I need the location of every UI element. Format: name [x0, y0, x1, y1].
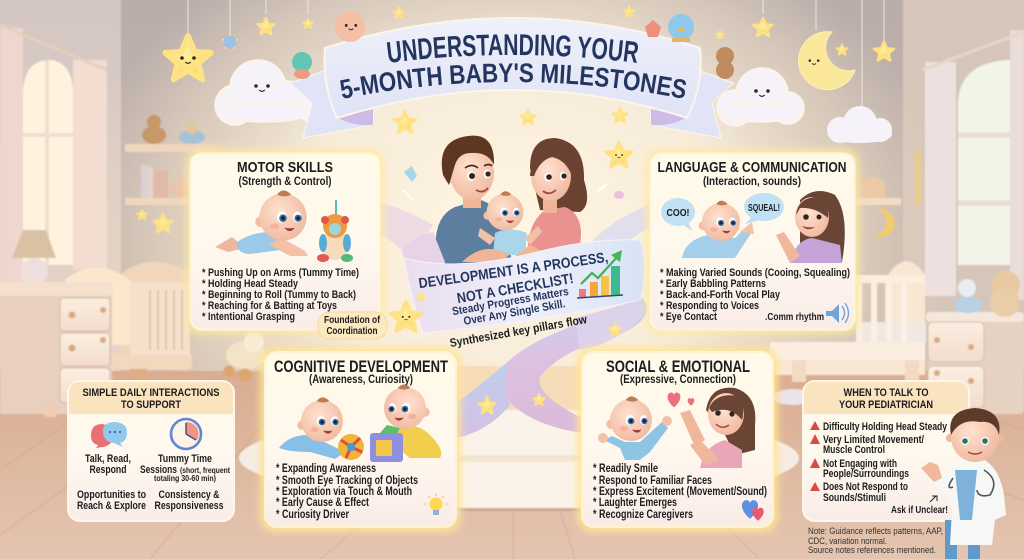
- warning list: [823, 421, 948, 504]
- heading: SIMPLE DAILY INTERACTIONS: [82, 387, 220, 399]
- milestones list: * Making Varied Sounds (Cooing, Squealing): [660, 267, 850, 279]
- icon: speaker: [826, 303, 848, 323]
- icon: speech bubbles: [91, 422, 127, 448]
- milestones list: * Recognize Caregivers: [593, 509, 693, 521]
- warning list: Very Limited Movement/: [823, 434, 924, 446]
- banner toppers: [292, 12, 734, 79]
- milestones list: * Exploration via Touch & Mouth: [276, 486, 412, 498]
- milestones list: * Curiosity Driver: [276, 509, 349, 521]
- source note: Source notes references mentioned.: [808, 545, 936, 556]
- heading: SOCIAL & EMOTIONAL: [606, 357, 750, 376]
- illustration: baby with cube: [370, 384, 441, 462]
- callout body: Steady Progress Matters: [451, 286, 570, 318]
- milestones list: * Early Cause & Effect: [276, 497, 369, 509]
- label: opportunities: [77, 489, 146, 512]
- milestones list: [276, 463, 418, 521]
- callout heading: DEVELOPMENT IS A PROCESS,: [418, 250, 609, 292]
- family illustration: [435, 136, 587, 264]
- swoosh band: left: [457, 360, 510, 438]
- label: opportunities: Reach & Explore: [77, 500, 146, 512]
- illustration: babbling baby: [682, 201, 754, 258]
- speech bubble: coo: COO!: [666, 207, 690, 219]
- milestones list: * Respond to Familiar Faces: [593, 475, 712, 487]
- subheading: (Interaction, sounds): [703, 176, 801, 188]
- clouds: [215, 60, 892, 143]
- panel: simple daily interactions: TO SUPPORT: [121, 399, 181, 411]
- illustration: plush toy: [317, 198, 381, 262]
- heading: LANGUAGE & COMMUNICATION: [658, 160, 846, 176]
- right dresser: [926, 312, 1024, 414]
- milestones list: [202, 267, 359, 323]
- subheading: (Expressive, Connection): [620, 374, 736, 386]
- right crib: [770, 261, 926, 382]
- label: tummy time sessions: Tummy Time: [158, 453, 212, 465]
- milestones list: .Comm rhythm: [765, 312, 824, 323]
- milestones list: [593, 463, 767, 521]
- ribbon caption: Synthesized key pillars flow: [449, 312, 589, 350]
- hanging mobiles: stars and moon: [165, 0, 894, 107]
- icon: blue and red hearts: [742, 500, 764, 521]
- warning list: Not Engaging with: [823, 458, 897, 470]
- center ribbon callout: [402, 232, 645, 333]
- milestones list: * Responding to Voices: [660, 300, 759, 312]
- label: talk read respond: Talk, Read,: [85, 453, 131, 465]
- left crib: [65, 262, 192, 380]
- mattress: [457, 410, 582, 511]
- banner tails: [290, 70, 373, 138]
- warning list: People/Surroundings: [823, 468, 909, 480]
- icon: toy house: [645, 20, 661, 37]
- teddy bear and toy on dresser: [954, 271, 1020, 317]
- heading: COGNITIVE DEVELOPMENT: [274, 357, 448, 376]
- icon: hearts: [668, 393, 694, 407]
- heading: MOTOR SKILLS: [237, 159, 333, 176]
- icon: big smiling star: [165, 36, 211, 79]
- decorative stars under banner: [394, 108, 632, 201]
- dad: [435, 136, 512, 264]
- label: tummy time sessions: Sessions: [140, 464, 177, 476]
- icon: right cloud: [717, 68, 804, 126]
- label: consistency: Responsiveness: [154, 500, 224, 512]
- label: talk read respond: [85, 453, 131, 476]
- label: opportunities: Opportunities to: [77, 489, 146, 501]
- icon: left cloud: [215, 60, 323, 125]
- peach floor glow behind ribbon: [457, 366, 582, 416]
- swoosh band: right curl: [502, 296, 647, 433]
- left window: [0, 25, 107, 288]
- lamp: [12, 230, 56, 286]
- icon: clock: [171, 419, 201, 449]
- milestones list: * Readily Smile: [593, 463, 658, 475]
- banner body: [324, 18, 701, 118]
- badge: foundation of coordination: Foundation of: [324, 315, 381, 326]
- label: talk read respond: Respond: [90, 464, 126, 476]
- milestones list: * Smooth Eye Tracking of Objects: [276, 475, 418, 487]
- speech bubble: squeal: [744, 193, 784, 224]
- ribbon body: [404, 240, 645, 333]
- illustration: baby with ball: [279, 397, 364, 460]
- title text: UNDERSTANDING YOUR: [386, 34, 638, 63]
- arrow: [930, 496, 937, 502]
- ribbon stars: [391, 292, 622, 413]
- warning icons: [810, 421, 820, 491]
- milestones list: * Expanding Awareness: [276, 463, 376, 475]
- illustration: tummy-time baby: [215, 190, 308, 256]
- baby held by parents: [462, 191, 545, 262]
- icon: far right cloud: [827, 106, 892, 143]
- panel: cognitive development: [260, 347, 461, 532]
- speech bubble: squeal: SQUEAL!: [748, 202, 780, 214]
- speech bubble: coo: [661, 198, 695, 231]
- warning list: Sounds/Stimuli: [823, 492, 886, 504]
- label: consistency: [154, 489, 224, 512]
- milestones list: * Laughter Emerges: [593, 497, 677, 509]
- milestones list: * Holding Head Steady: [202, 278, 299, 290]
- milestones list: * Intentional Grasping: [202, 311, 295, 323]
- right shelf: [856, 150, 921, 237]
- label: consistency: Consistency &: [158, 489, 220, 501]
- icon: light bulb: [423, 493, 449, 515]
- panel: when to talk to your pediatrician: YOUR PEDIATRICIAN: [839, 399, 933, 411]
- label: tummy time sessions: [140, 453, 230, 483]
- icon: pink baby toy: [335, 12, 365, 42]
- illustration: doctor: [921, 408, 1006, 559]
- icon: teddy bear: [716, 47, 734, 79]
- heading: WHEN TO TALK TO: [844, 387, 929, 399]
- panel: social and emotional: [577, 347, 778, 532]
- milestones list: * Eye Contact: [660, 311, 717, 323]
- header band: [69, 382, 233, 414]
- title banner: 5-MONTH BABY'S MILESTONES: [340, 63, 686, 98]
- flowing ribbon swooshes: [336, 197, 650, 438]
- ribbon lower fold: [575, 300, 643, 350]
- source note: [808, 526, 943, 556]
- left shelves: [125, 115, 217, 232]
- icon: crescent moon: [799, 32, 855, 90]
- panel: language and communication: [646, 149, 859, 334]
- illustration: smiling baby: [598, 396, 672, 460]
- growth chart icon: [577, 250, 623, 298]
- plush lamb on floor: [224, 332, 266, 382]
- ribbon fold: [402, 232, 445, 333]
- panel: simple daily interactions: [68, 381, 234, 521]
- milestones list: * Beginning to Roll (Tummy to Back): [202, 289, 356, 301]
- panel: when to talk to your pediatrician: [803, 381, 969, 521]
- source note: Note: Guidance reflects patterns, AAP,: [808, 526, 943, 537]
- milestones list: * Express Excitement (Movement/Sound): [593, 486, 767, 498]
- illustration: mother waving: [680, 388, 755, 468]
- label: tummy time sessions: totaling 30-60 min): [154, 474, 216, 483]
- header band: [804, 382, 968, 414]
- milestones list: * Back-and-Forth Vocal Play: [660, 289, 781, 301]
- warning list: Muscle Control: [823, 444, 885, 456]
- right window: [922, 30, 1024, 300]
- label: tummy time sessions: (short, frequent: [180, 466, 230, 475]
- badge: foundation of coordination: Coordination: [326, 326, 378, 337]
- warning list: Does Not Respond to: [823, 481, 908, 493]
- rug: [239, 414, 799, 502]
- panel: motor skills: [186, 149, 384, 334]
- milestones list: * Early Babbling Patterns: [660, 278, 766, 290]
- center ribbon callout: NOT A CHECKLIST!: [456, 271, 575, 307]
- left dresser: [0, 282, 113, 417]
- subheading: (Awareness, Curiosity): [309, 374, 413, 386]
- badge: foundation of coordination: [318, 312, 387, 339]
- illustration: talking mother: [776, 191, 845, 263]
- callout: ask if unclear: Ask if Unclear!: [891, 504, 948, 516]
- title banner: [289, 17, 735, 138]
- milestones list: * Pushing Up on Arms (Tummy Time): [202, 267, 359, 279]
- milestones list: * Reaching for & Batting at Toys: [202, 300, 337, 312]
- icon: blue bird: [668, 14, 694, 42]
- floor toy cushion right: [773, 389, 813, 405]
- source note: CDC, variation normal.: [808, 536, 887, 547]
- subheading: (Strength & Control): [238, 176, 332, 188]
- mom: [528, 138, 587, 262]
- center ribbon callout: Over Any Single Skill.: [463, 298, 566, 328]
- icon: green toy: [292, 52, 312, 79]
- milestones list: [660, 267, 850, 323]
- warning list: Difficulty Holding Head Steady: [823, 421, 948, 433]
